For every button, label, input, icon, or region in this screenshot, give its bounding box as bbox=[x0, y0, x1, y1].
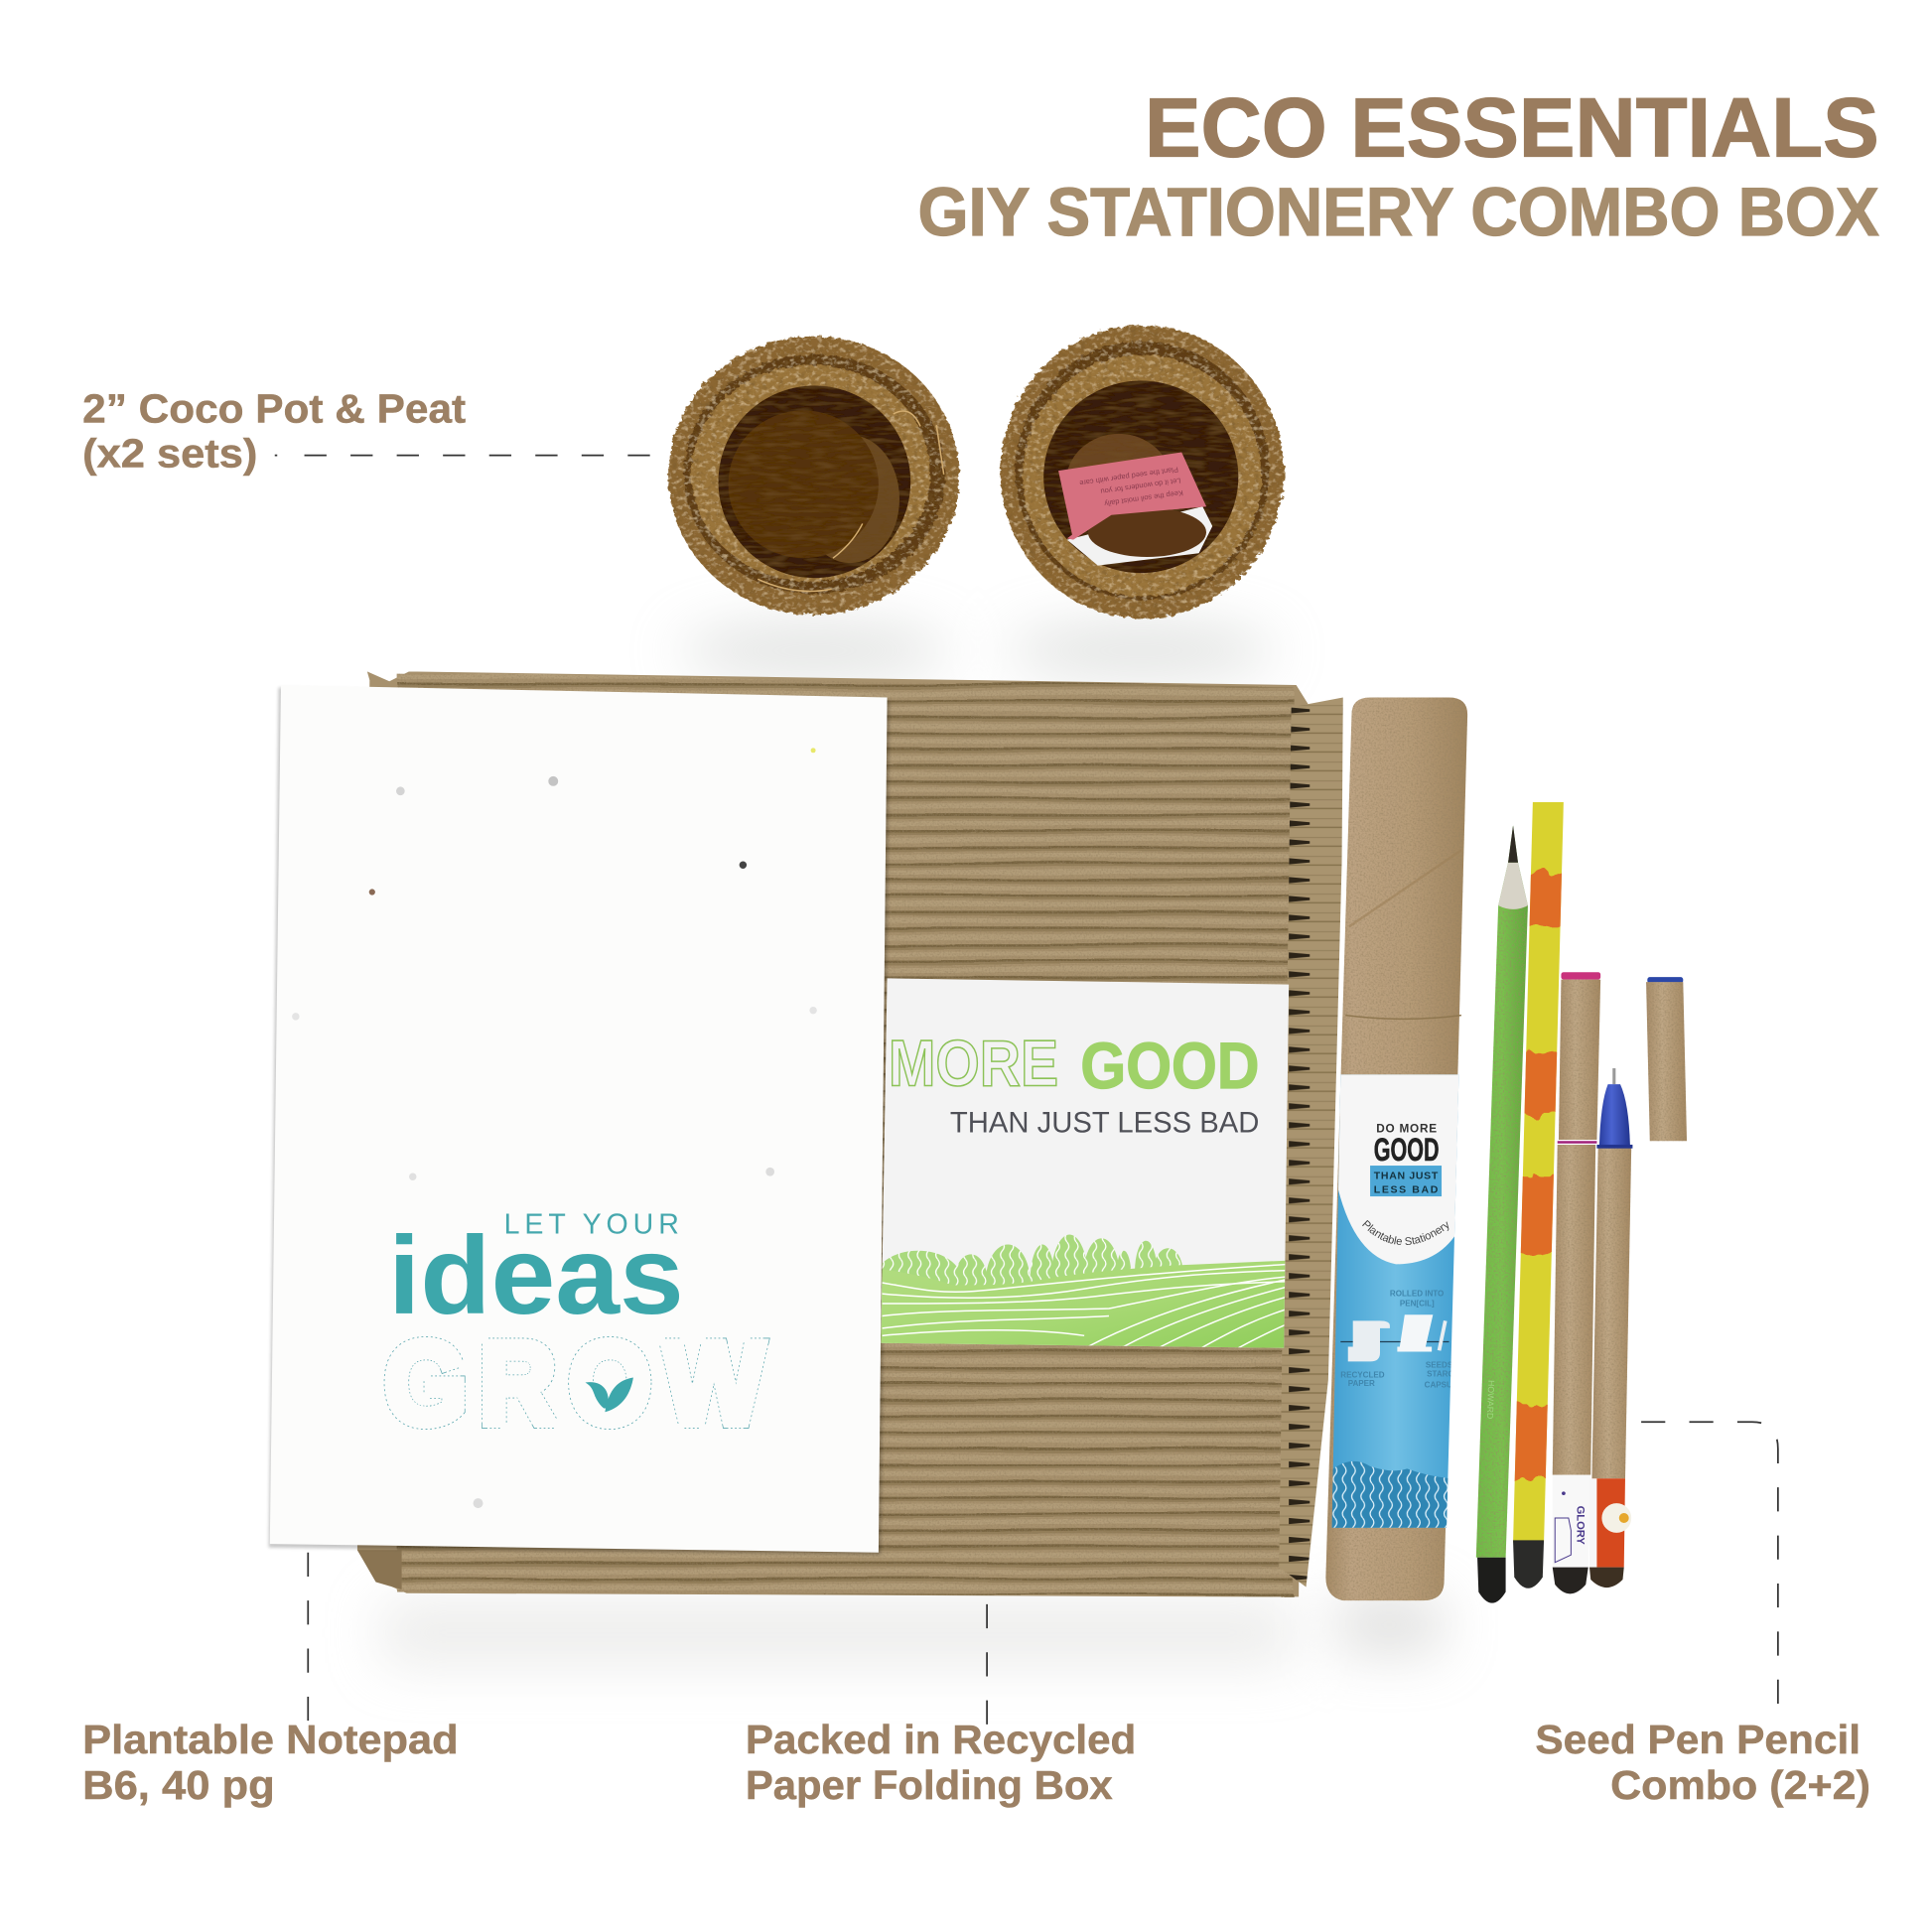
pen: seed pen with cap on top bbox=[1553, 972, 1600, 1593]
box: recycled paper folding box bbox=[357, 671, 1343, 1596]
label: box: Paper Folding Box bbox=[746, 1762, 1113, 1808]
title bbox=[918, 81, 1879, 250]
label: coco pot: 2” Coco Pot & Peat bbox=[82, 386, 466, 432]
leader line: pens bbox=[1641, 1422, 1778, 1725]
band slogan bbox=[889, 1026, 1259, 1140]
tube label: CAPSULE bbox=[1425, 1380, 1463, 1389]
notepad cover text: GROW bbox=[384, 1317, 764, 1449]
tube label: ROLLED INTO bbox=[1390, 1290, 1444, 1299]
pencil: green seed pencil bbox=[1476, 826, 1528, 1603]
icon: coco pot right with seed packet bbox=[1001, 326, 1284, 619]
belly band bbox=[874, 978, 1289, 1350]
seed packet: Keep the soil moist daily bbox=[1103, 488, 1183, 508]
notepad cover text: LET YOUR bbox=[504, 1208, 679, 1240]
tube label: DO MORE bbox=[1376, 1123, 1437, 1136]
pencil: yellow and orange seed pencil bbox=[1513, 802, 1564, 1588]
label: coco pot: (x2 sets) bbox=[82, 430, 257, 476]
soft shadows bbox=[382, 623, 1442, 1663]
seed packet: Plant the seed paper with care bbox=[1079, 465, 1178, 487]
label: pens: Combo (2+2) bbox=[1610, 1762, 1870, 1808]
title: GIY STATIONERY COMBO BOX bbox=[918, 175, 1879, 250]
label: pens: Seed Pen Pencil bbox=[1535, 1717, 1861, 1762]
seed packet bbox=[1058, 452, 1212, 566]
tube label: SEEDS bbox=[1426, 1361, 1453, 1370]
icon: sprout leaf bbox=[586, 1378, 633, 1412]
tube: cardboard pencil tube bbox=[1325, 697, 1467, 1600]
label: box bbox=[746, 1717, 1136, 1808]
label: coco pot bbox=[82, 386, 466, 476]
label: notepad: B6, 40 pg bbox=[82, 1762, 275, 1808]
tube label: LESS BAD bbox=[1374, 1183, 1439, 1195]
pen cap: separate cap bbox=[1646, 977, 1687, 1141]
title: ECO ESSENTIALS bbox=[1145, 81, 1879, 175]
seed specks bbox=[292, 748, 817, 1508]
notepad cover text bbox=[384, 1208, 764, 1449]
label: notepad bbox=[82, 1717, 459, 1808]
tube label: PAPER bbox=[1348, 1379, 1375, 1388]
band landscape bbox=[874, 1235, 1289, 1350]
band slogan: MORE bbox=[889, 1026, 1058, 1099]
notepad cover text: GROW bbox=[384, 1317, 764, 1449]
label: pens bbox=[1535, 1717, 1870, 1808]
notepad cover text: ideas bbox=[388, 1213, 684, 1337]
icon: coco pot left bbox=[668, 337, 959, 615]
leader line: notepad bbox=[307, 1553, 309, 1722]
label: notepad: Plantable Notepad bbox=[82, 1717, 459, 1762]
pen: seed pen with blue nib bbox=[1589, 1068, 1632, 1587]
leader line: box bbox=[986, 1604, 988, 1725]
tube label: STARCH bbox=[1427, 1369, 1459, 1378]
box bottom flap bbox=[357, 1550, 402, 1589]
tube label: Plantable Stationery bbox=[1362, 1219, 1449, 1245]
tube label: PEN[CIL] bbox=[1400, 1300, 1435, 1309]
tube label: GOOD bbox=[1374, 1132, 1440, 1168]
tube label: RECYCLED bbox=[1340, 1371, 1385, 1380]
band slogan: GOOD bbox=[1080, 1029, 1259, 1102]
seed packet: Let it do wonders for you bbox=[1100, 477, 1181, 496]
band slogan: THAN JUST LESS BAD bbox=[950, 1107, 1259, 1140]
label: box: Packed in Recycled bbox=[746, 1717, 1136, 1762]
pen: seed pen with cap on top: GLORY bbox=[1575, 1506, 1587, 1545]
notepad: plantable notepad bbox=[269, 685, 890, 1555]
tube label: THAN JUST bbox=[1374, 1171, 1439, 1182]
pencil: green seed pencil: HOWARD bbox=[1485, 1380, 1496, 1419]
tube label bbox=[1332, 1074, 1459, 1528]
leader line: coco pot bbox=[275, 455, 650, 457]
box side flap bbox=[1279, 697, 1343, 1587]
